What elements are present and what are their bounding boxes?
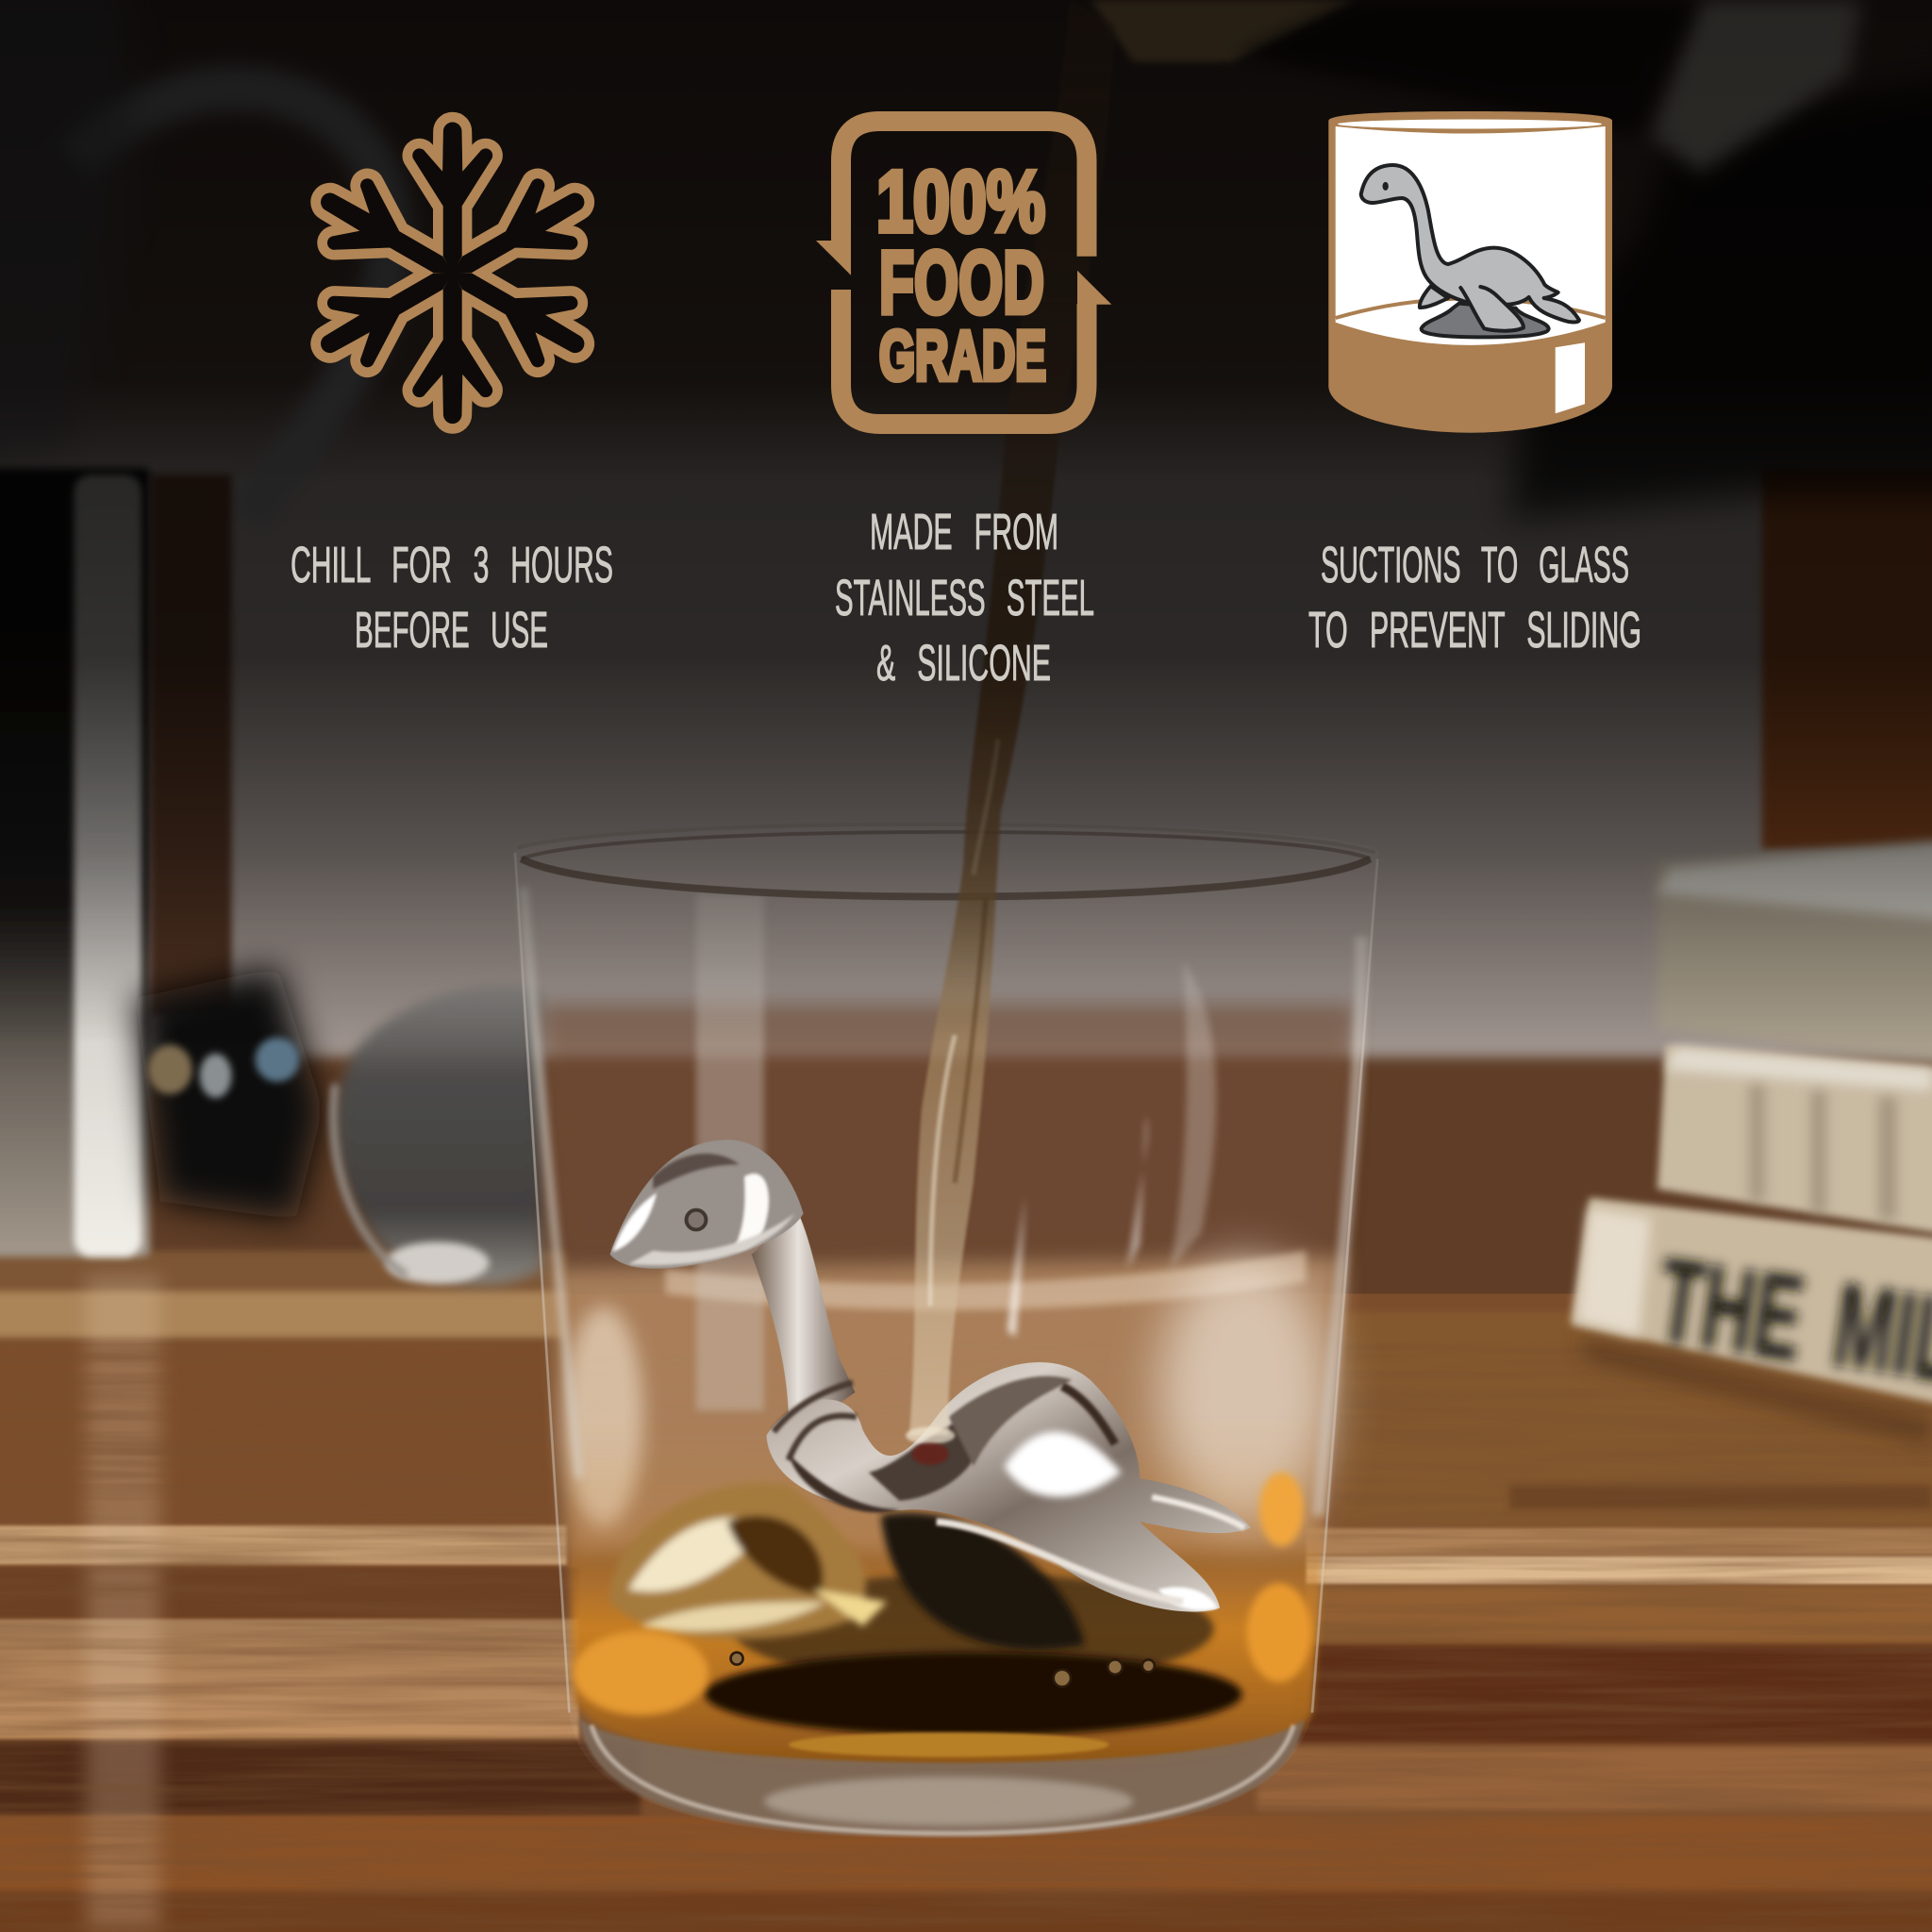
badge text: GRADE <box>879 317 1046 394</box>
Nessie cartoon <box>1361 165 1579 337</box>
badge text <box>876 154 1046 394</box>
glass silhouette <box>1328 111 1612 433</box>
badge text: FOOD <box>879 232 1044 332</box>
caption: stainless steel and silicone: MADE FROM <box>870 504 1058 560</box>
neck <box>752 1214 855 1440</box>
background wall <box>0 0 1932 1109</box>
liquid surface line <box>1336 298 1606 318</box>
eye <box>1383 182 1388 190</box>
head <box>610 1140 804 1269</box>
book left edge highlight <box>1577 1208 1651 1337</box>
body highlight <box>1004 1432 1122 1497</box>
blurred handle at top left <box>74 89 390 518</box>
badge text: 100% <box>876 154 1045 250</box>
table reflection band <box>665 1251 1306 1310</box>
dark suction cup shadow <box>733 1574 1214 1684</box>
dark mass at top left <box>0 0 136 468</box>
icon: glass with Nessie figure <box>1328 111 1612 433</box>
interior refracted brown band <box>540 1004 1356 1257</box>
glass of whisky <box>515 823 1379 1839</box>
table rear section <box>0 1058 1932 1341</box>
rear flipper <box>1420 286 1448 308</box>
caption: suctions to glass: SUCTIONS TO GLASS <box>1321 537 1629 593</box>
caption: chill for 3 hours: BEFORE USE <box>355 602 548 658</box>
head highlights and eye <box>612 1192 657 1252</box>
glass body <box>515 823 1379 1839</box>
caption: chill for 3 hours: CHILL FOR 3 HOURS <box>291 537 613 593</box>
label notch <box>1556 342 1585 413</box>
whisky liquid <box>564 1417 1331 1770</box>
wooden table top with light stripes <box>0 1251 1932 1932</box>
whisky pour stream <box>906 0 1115 1465</box>
glass rim opening <box>1338 119 1602 128</box>
caption: suctions to glass: TO PREVENT SLIDING <box>1308 602 1641 658</box>
caption: stainless steel and silicone <box>835 504 1094 691</box>
body shadows <box>869 1417 980 1501</box>
caption: suctions to glass <box>1308 537 1641 658</box>
bright amber at right <box>1259 1473 1304 1546</box>
caption: stainless steel and silicone: STAINLESS STEEL <box>835 570 1094 626</box>
cocktail shaker at left <box>0 468 232 1257</box>
collar detail <box>774 1382 857 1460</box>
steel Nessie figure <box>610 1140 1251 1649</box>
body and neck <box>1361 165 1579 322</box>
glow behind the figure <box>1158 1257 1331 1528</box>
glass white interior <box>1336 126 1606 345</box>
icon: 100% food grade badge <box>816 121 1111 425</box>
recycling style frame <box>841 121 1087 425</box>
stack of blurred books <box>1571 841 1932 1411</box>
body and flippers <box>766 1362 1251 1612</box>
bright swirling whisky at left <box>610 1483 887 1639</box>
interior lighter table reflection <box>555 1257 1345 1553</box>
brown cabinet panel on the right <box>1762 468 1932 850</box>
suction cup bubbles <box>731 1653 1155 1687</box>
caption: chill for 3 hours <box>291 537 613 658</box>
caption: stainless steel and silicone: & SILICONE <box>876 635 1051 691</box>
front flipper <box>1460 287 1524 331</box>
jigger and strainer behind the glass <box>136 967 542 1285</box>
frame arrow heads <box>816 241 1111 305</box>
book shadow on table <box>1577 1337 1932 1448</box>
icon: snowflake <box>302 123 603 424</box>
glass base <box>579 1719 1304 1836</box>
blurred dark hand and bottle at top right <box>1091 0 1932 518</box>
glass rim <box>515 824 1377 1713</box>
under body dark <box>881 1513 1084 1649</box>
suction base <box>1422 304 1549 337</box>
vertical glass reflections <box>524 887 1361 1516</box>
